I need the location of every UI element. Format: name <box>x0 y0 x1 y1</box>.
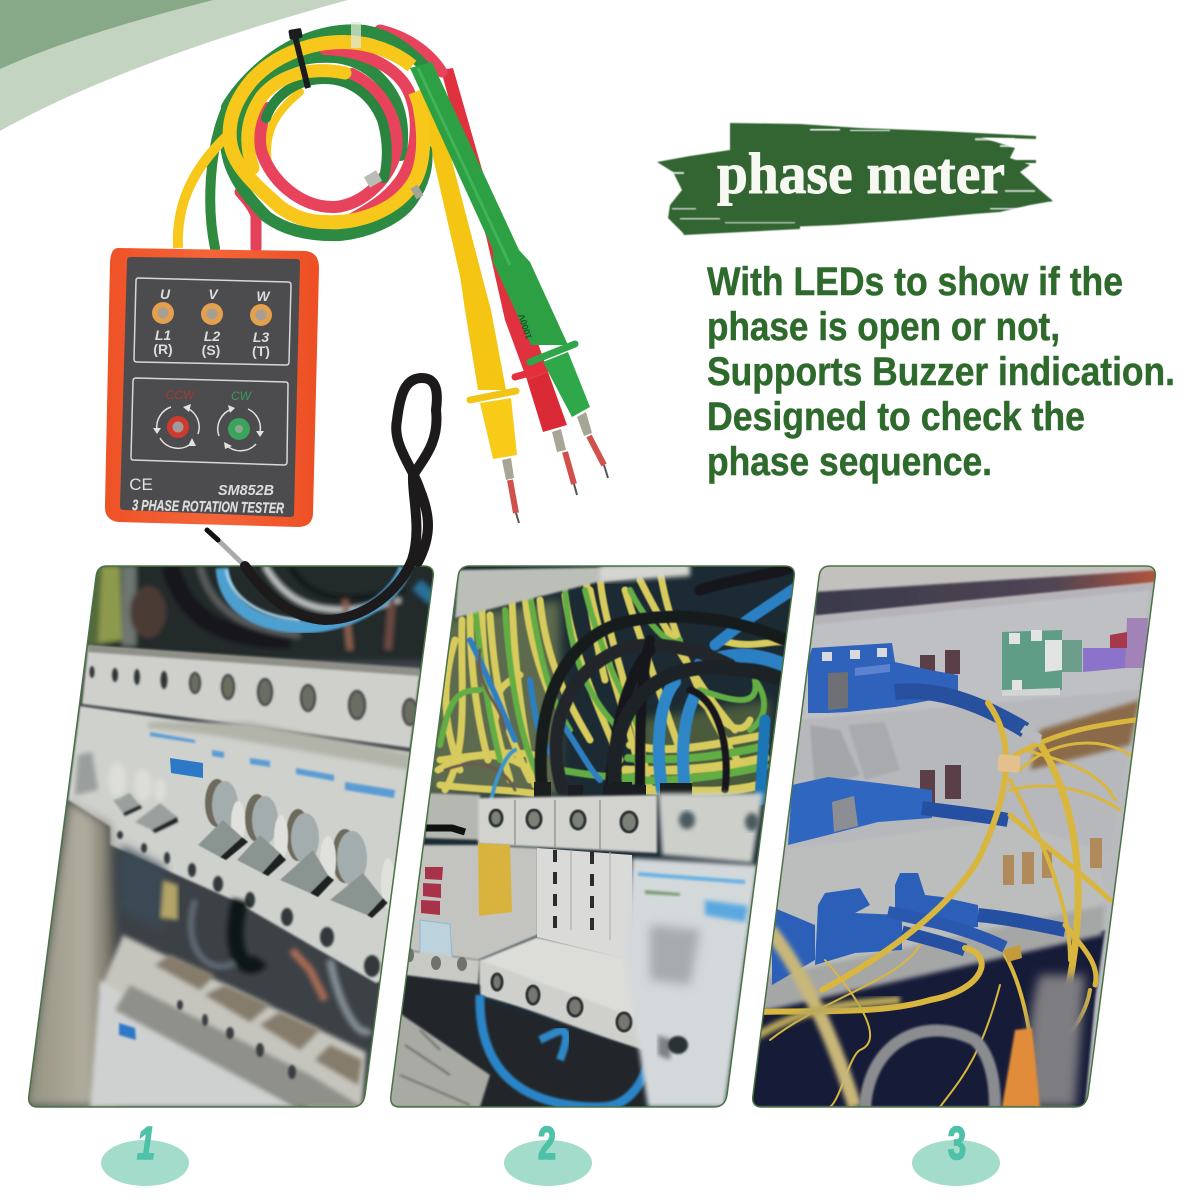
blue connectors middle <box>788 777 1008 845</box>
LED box outline <box>134 278 291 365</box>
breaker terminal row <box>82 646 420 748</box>
red probe <box>441 68 577 495</box>
number badge 1: 1 <box>137 1119 155 1169</box>
blue breaker switch <box>170 758 203 778</box>
blurred lower breaker rows <box>100 935 366 1107</box>
green middle loop <box>239 57 402 160</box>
blurred background cabinet <box>25 800 120 1107</box>
corner decoration: dark green swoosh <box>0 0 213 69</box>
description text: Designed to check the <box>707 395 1085 439</box>
tester device <box>105 248 319 527</box>
heading text: phase meter <box>717 141 1005 206</box>
CW label: CW <box>231 389 253 403</box>
number badge 3 <box>912 1119 1000 1186</box>
yellow main loop <box>230 42 423 222</box>
cable ties <box>288 22 423 199</box>
phase labels: (T) <box>252 343 270 359</box>
phase labels: W <box>256 288 271 304</box>
green outer top <box>227 30 424 107</box>
rotation box outline <box>131 378 288 465</box>
phase labels <box>153 286 271 359</box>
photo panel 1: circuit breakers <box>20 560 440 1115</box>
phase labels: L3 <box>253 329 269 345</box>
blue connectors top <box>808 643 1025 730</box>
green probe <box>410 62 608 478</box>
lower terminal block <box>478 936 638 1019</box>
CE mark: CE <box>129 475 153 494</box>
CW indicator <box>218 405 264 451</box>
phase labels: (S) <box>202 342 220 358</box>
green inner loop <box>266 79 387 178</box>
blue connectors bottom <box>772 873 1065 985</box>
blurred foreground cable <box>770 930 855 1107</box>
phase labels: L1 <box>155 327 171 343</box>
test leads and coil <box>178 30 442 248</box>
phase labels: (R) <box>153 341 173 357</box>
phase labels: U <box>160 286 171 302</box>
number badge 3: 3 <box>948 1119 966 1169</box>
red outer loop <box>325 49 416 219</box>
port windows <box>920 650 961 806</box>
number badge 2 <box>504 1119 592 1186</box>
description text: With LEDs to show if the <box>707 260 1123 304</box>
phase labels: V <box>208 286 219 302</box>
blue and black cables <box>490 568 800 805</box>
orange connector <box>1002 1028 1040 1107</box>
shelf faces <box>800 590 1150 735</box>
phase LEDs <box>152 302 272 326</box>
yellow probe <box>420 100 519 523</box>
breaker drums and levers <box>198 779 395 918</box>
photo panel 3: fibre optic patch panel <box>745 560 1165 1115</box>
number badge 1 <box>101 1119 189 1186</box>
CCW indicator <box>153 404 199 448</box>
CCW label: CCW <box>166 388 196 402</box>
breaker body <box>68 706 410 983</box>
product name: 3 PHASE ROTATION TESTER <box>132 497 284 517</box>
panel 2 border <box>391 566 794 1107</box>
green probe: 1000V <box>516 313 534 340</box>
relay module with yellow label <box>405 845 538 960</box>
grey dust caps <box>810 726 860 780</box>
grey conduit ring <box>865 1030 995 1107</box>
terminal block upper <box>425 793 480 840</box>
description text <box>707 260 1175 484</box>
yellow fibres <box>760 703 1135 1107</box>
panel 1 border <box>29 566 433 1107</box>
green outer bottom <box>226 140 426 235</box>
yellow second loop <box>248 71 345 168</box>
number badge 2: 2 <box>538 1119 556 1169</box>
heading brush banner <box>657 123 1053 235</box>
orange casing <box>105 248 319 527</box>
purple connector <box>1083 648 1126 672</box>
centre rail with slots <box>537 848 632 960</box>
wrist strap <box>207 378 437 620</box>
dark face plate <box>120 257 300 517</box>
panel 3 border <box>753 566 1155 1107</box>
phase labels: L2 <box>204 328 220 344</box>
green module <box>1002 630 1082 696</box>
yellow inner arc <box>267 92 300 165</box>
red inner loop <box>260 74 397 207</box>
corner decoration: light green swoosh <box>0 0 348 131</box>
cable clips <box>997 754 1021 773</box>
red lead <box>240 192 256 248</box>
model number: SM852B <box>218 482 274 499</box>
green lead <box>210 107 227 248</box>
blurred MCB module <box>625 858 758 1107</box>
terminal bar at top <box>455 566 685 618</box>
brown cable tray <box>1030 700 1140 770</box>
dark lower cables <box>402 974 642 1106</box>
dark equipment base <box>750 930 1105 1107</box>
yellow lead <box>178 137 226 248</box>
red top wire <box>380 30 442 72</box>
photo panel 2: wiring terminals <box>385 560 805 1115</box>
description text: phase sequence. <box>707 440 992 484</box>
description text: phase is open or not, <box>707 305 1060 349</box>
colourful wire bundle <box>438 570 785 795</box>
